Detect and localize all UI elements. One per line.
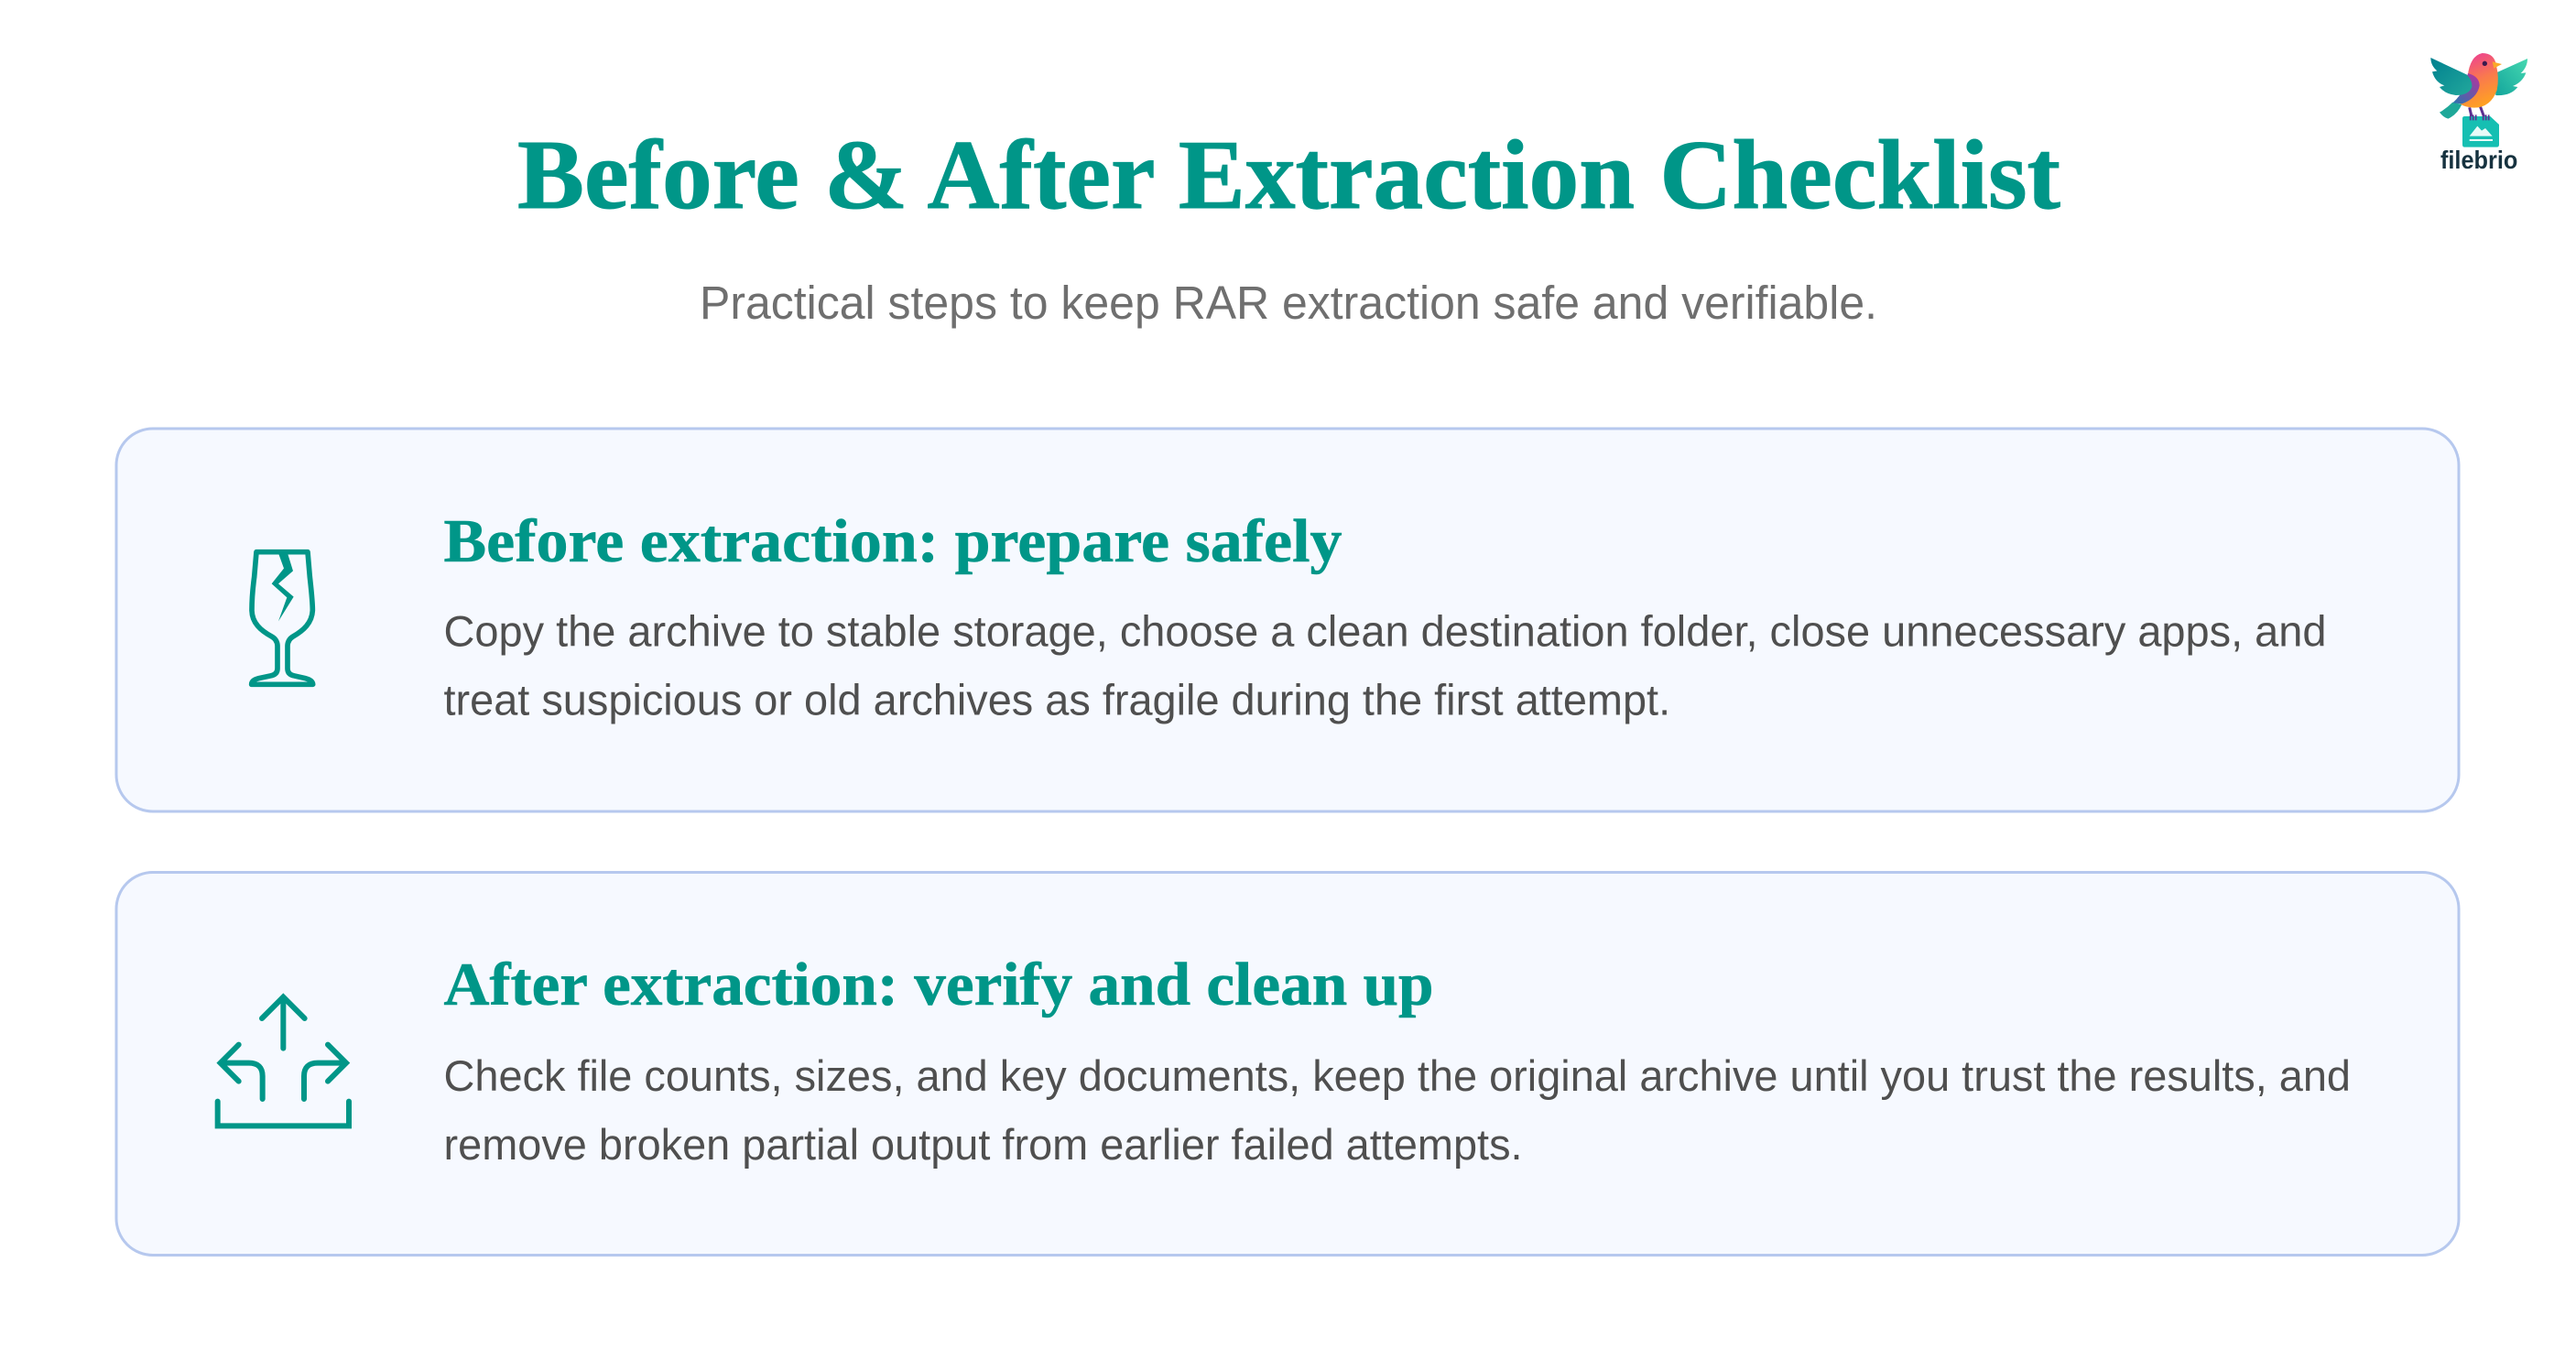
icon: feet xyxy=(2471,114,2489,120)
body text: Check file counts, sizes, and key documents, keep the original archive until you trust the results, and xyxy=(443,1052,2351,1100)
icon: beak xyxy=(2493,61,2502,69)
panel: before extraction xyxy=(116,429,2459,811)
body text: treat suspicious or old archives as fragile during the first attempt. xyxy=(443,676,1670,724)
icon: legs xyxy=(2470,106,2485,120)
icon: unpack arrows from tray xyxy=(218,997,349,1126)
panel background xyxy=(116,429,2459,811)
icon: inner wing xyxy=(2452,73,2480,103)
icon: bird body xyxy=(2459,53,2498,108)
title: Before & After Extraction Checklist xyxy=(517,121,2060,230)
icon: file mountains xyxy=(2470,126,2493,141)
body text: remove broken partial output from earlier failed attempts. xyxy=(443,1121,1523,1169)
icon: fragile broken glass xyxy=(252,552,313,684)
subtitle: Practical steps to keep RAR extraction safe and verifiable. xyxy=(700,277,1877,329)
heading: After extraction: verify and clean up xyxy=(443,951,1434,1018)
icon: eye xyxy=(2483,61,2487,66)
logo: filebrio bird xyxy=(2430,53,2527,174)
icon: right wing xyxy=(2495,59,2527,95)
panel: after extraction xyxy=(116,872,2459,1255)
logo wordmark: filebrio xyxy=(2440,146,2517,174)
panel background xyxy=(116,872,2459,1255)
body text xyxy=(443,1052,2351,1169)
icon: file xyxy=(2462,116,2499,147)
icon: left wing xyxy=(2430,58,2472,95)
body text xyxy=(443,608,2326,724)
icon: tail xyxy=(2440,103,2462,119)
body text: Copy the archive to stable storage, choose a clean destination folder, close unnecessary apps, and xyxy=(443,608,2326,656)
heading: Before extraction: prepare safely xyxy=(443,507,1342,575)
